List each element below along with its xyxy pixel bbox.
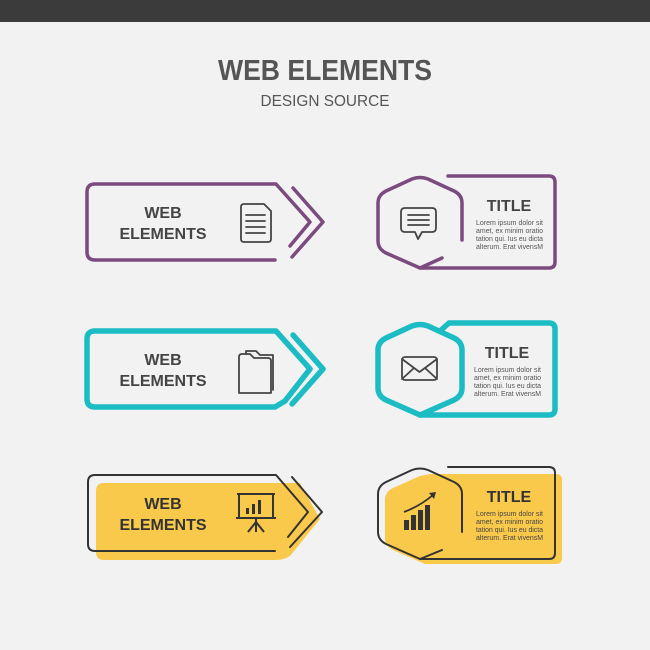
row 2 right text: tation qui. Ius eu dicta [474, 383, 541, 390]
row 2 right: teal hexagon card [378, 323, 555, 415]
row 3 right text: alterum. Erat vivensM [476, 535, 543, 542]
row 3 left: yellow arrow box [88, 475, 322, 560]
row 2 left text: WEB [144, 352, 182, 369]
row 2 right text: alterum. Erat vivensM [474, 391, 541, 398]
row 3 right: yellow hexagon card [378, 467, 562, 564]
row 3 right text: amet, ex minim oratio [476, 519, 543, 526]
row 2 right text: TITLE [485, 345, 530, 362]
subtitle: DESIGN SOURCE [260, 93, 390, 110]
row 3 left text: WEB [144, 496, 182, 513]
row 1 right text: Lorem ipsum dolor sit [476, 220, 543, 227]
text: ELEMENTS [119, 517, 207, 534]
row 2 left: teal arrow box [87, 331, 323, 407]
row 1 right text: TITLE [487, 198, 532, 215]
row 1 right text: tation qui. Ius eu dicta [476, 236, 543, 243]
row 3 right text [476, 489, 543, 542]
text: ELEMENTS [119, 226, 207, 243]
icon: document [241, 204, 271, 242]
row 1 right: purple hexagon card [378, 176, 555, 268]
icon: growth chart [404, 492, 436, 530]
icon: chat bubble [401, 208, 436, 239]
row 3 right text: tation qui. Ius eu dicta [476, 527, 543, 534]
title: WEB ELEMENTS [218, 55, 432, 87]
row 2 right text: Lorem ipsum dolor sit [474, 367, 541, 374]
top bar [0, 0, 650, 22]
row 1 right text [476, 198, 543, 251]
row 3 right text: Lorem ipsum dolor sit [476, 511, 543, 518]
icon: envelope [402, 357, 437, 380]
row 1 right text: alterum. Erat vivensM [476, 244, 543, 251]
row 2 right text [474, 345, 541, 398]
icon: presentation board [236, 494, 276, 532]
row 1 left: purple arrow box [87, 184, 323, 260]
icon: folder [239, 351, 273, 393]
row 2 right text: amet, ex minim oratio [474, 375, 541, 382]
row 1 left text: WEB [144, 205, 182, 222]
text: ELEMENTS [119, 373, 207, 390]
row 1 right text: amet, ex minim oratio [476, 228, 543, 235]
row 3 right text: TITLE [487, 489, 532, 506]
